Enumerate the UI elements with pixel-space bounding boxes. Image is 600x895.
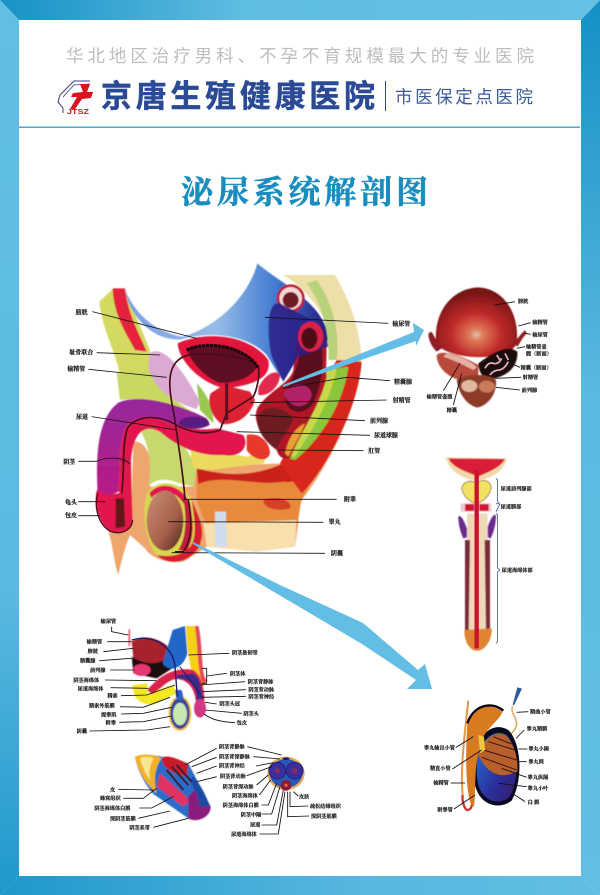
labels: 输精管壶 — [526, 343, 547, 351]
bladder posterior view — [427, 287, 552, 414]
pubic symphysis — [148, 351, 200, 409]
testis labels: 睾丸小隔 — [528, 745, 550, 753]
pelvic lateral labels: 阴囊 — [77, 727, 88, 735]
labels: 膀胱 — [518, 297, 529, 305]
labels: 尿道前列腺部 — [501, 485, 532, 493]
labels — [427, 297, 552, 414]
hospital logo — [58, 81, 93, 116]
pelvic lateral labels: 阴茎海绵体 — [73, 676, 100, 684]
header rule — [19, 126, 580, 128]
pelvic red wall and green fat — [280, 360, 362, 493]
testis labels: 睾丸精膜 — [527, 725, 548, 733]
labels — [501, 485, 533, 574]
pelvic lateral labels: 附睾 — [106, 719, 116, 727]
labels: 腹（断面） — [526, 350, 552, 358]
testis labels: 精直小管 — [430, 764, 451, 772]
seminal vesicle — [258, 372, 280, 395]
cross-section labels: 阴茎背神经 — [219, 762, 246, 770]
skin, thigh and buttock — [100, 363, 362, 575]
dissection labels: 深阴茎筋膜 — [110, 814, 137, 822]
sharp anatomical details — [122, 354, 259, 500]
urethra section — [446, 457, 533, 651]
labels: 输精管 — [532, 318, 549, 326]
testis labels — [424, 707, 551, 813]
pelvic lateral labels: 阴茎体 — [230, 669, 246, 677]
pelvic lateral labels: 输尿管 — [101, 617, 117, 625]
cross-section labels: 阴茎海绵体 — [232, 791, 259, 799]
labels: 输尿管 — [532, 331, 549, 339]
cross-section labels: 阴茎背静脉 — [219, 742, 246, 750]
testis leaders — [451, 712, 528, 809]
tagline: 华北地区治疗男科、不孕不育规模最大的专业医院 — [66, 46, 534, 66]
cross-section labels: 疏松结缔组织 — [310, 802, 342, 810]
dissection labels: 阴茎系带 — [129, 824, 151, 832]
cross-section labels: 皮肤 — [299, 793, 310, 801]
dissection labels: 阴茎海绵体白膜 — [94, 804, 131, 812]
cross-section labels: 阴茎背深静脉 — [219, 752, 251, 760]
cross-section labels: 深阴茎筋膜 — [311, 812, 338, 820]
testis detail — [424, 687, 551, 813]
cross-section labels: 阴茎背深动脉 — [223, 782, 254, 790]
cross-section labels: 尿道 — [250, 820, 261, 828]
pelvic lateral labels: 阴茎背动脉 — [248, 685, 275, 693]
cross-section labels: 阴茎背动脉 — [220, 772, 247, 780]
cross-section labels: 阴茎海绵体白膜 — [223, 801, 260, 809]
labels: 肛管 — [368, 447, 380, 455]
pelvic lateral labels: 输精管 — [87, 638, 103, 646]
pelvic lateral leaders — [89, 627, 246, 731]
labels: 射精管 — [393, 397, 411, 405]
testis labels: 附睾管 — [437, 805, 454, 813]
dissection labels — [94, 785, 151, 832]
pelvic lateral labels: 提睾肌 — [101, 710, 117, 718]
labels: 输尿管 — [392, 320, 410, 328]
labels: 包皮 — [65, 512, 77, 520]
spine — [283, 275, 362, 363]
bladder — [178, 336, 269, 388]
labels: 尿道膜部 — [501, 503, 522, 511]
testis labels: 精曲小管 — [530, 707, 551, 715]
title: 泌尿系统解剖图 — [181, 174, 428, 210]
pelvic lateral labels: 膀胱 — [88, 647, 99, 655]
testis labels: 白 膜 — [528, 798, 540, 806]
labels: 尿道球腺 — [374, 431, 398, 439]
sacral blue and rectal ring — [278, 286, 303, 311]
labels: 射精管 — [523, 373, 539, 381]
labels: 附睾 — [344, 496, 356, 504]
labels: 输精管壶腹 — [427, 393, 453, 401]
cross-section labels: 阴茎中隔 — [241, 811, 262, 819]
pelvic lateral illustration — [128, 626, 207, 731]
urethral band — [118, 418, 245, 495]
pelvic lateral labels: 尿道海绵体 — [78, 684, 104, 692]
testis labels: 睾丸输出小管 — [424, 744, 456, 752]
pelvic lateral labels: 精索 — [107, 692, 118, 700]
leader lines — [443, 302, 531, 405]
labels: 前列腺 — [370, 417, 388, 425]
main diagram: sagittal section — [63, 263, 412, 575]
labels: 精囊（断面） — [521, 364, 552, 372]
anatomy illustration — [96, 263, 362, 575]
labels: 前列腺 — [522, 386, 538, 394]
scrotum — [144, 483, 202, 562]
labels: 尿道 — [76, 413, 88, 421]
penis purple corpus — [97, 399, 210, 495]
hospital logo: JTSZ — [67, 107, 89, 116]
labels: 精囊腺 — [394, 378, 412, 386]
accreditation text: 市医保定点医院 — [395, 87, 533, 107]
pelvic lateral labels: 阴茎背静脉 — [248, 677, 274, 685]
cross-section labels: 尿道海绵体 — [231, 830, 258, 838]
testis labels: 睾丸纵隔 — [528, 773, 549, 781]
cross-section labels — [219, 742, 342, 838]
abdominal wall — [99, 288, 160, 400]
labels: 阴茎 — [63, 458, 76, 466]
pelvic lateral labels: 阴茎头冠 — [219, 699, 241, 707]
arrow: to testis detail — [193, 542, 432, 689]
dissection leaders — [118, 748, 217, 827]
labels: 阴囊 — [331, 549, 343, 557]
bracket — [496, 478, 500, 643]
pelvic organs lateral view and penile sections — [73, 617, 342, 838]
pelvic lateral labels: 精索外筋膜 — [89, 702, 116, 710]
labels: 输精管 — [67, 365, 85, 373]
rectus muscle — [113, 288, 147, 352]
leader lines — [78, 312, 390, 553]
testis labels: 睾丸网 — [528, 758, 544, 766]
cross-section illustration — [267, 757, 305, 791]
arrow: to bladder detail — [283, 323, 424, 387]
pelvic lateral labels: 包皮 — [237, 719, 248, 727]
header divider — [385, 81, 386, 111]
rectum — [256, 324, 327, 459]
pelvic lateral labels: 阴茎背神经 — [248, 692, 275, 700]
cross-section leaders — [247, 747, 309, 834]
pelvic lateral labels: 阴茎悬韧带 — [232, 649, 259, 657]
labels: 睾丸 — [329, 518, 341, 526]
hospital name: 京唐生殖健康医院 — [101, 79, 375, 114]
perineal bulb — [247, 434, 270, 459]
pelvic lateral labels — [73, 617, 275, 735]
prostate — [209, 385, 255, 424]
labels — [63, 308, 412, 557]
pelvic lateral labels: 精囊腺 — [80, 657, 96, 665]
header — [19, 46, 580, 128]
peritoneum blue — [125, 263, 328, 382]
labels: 尿道海绵体部 — [502, 566, 533, 574]
labels: 耻骨联合 — [69, 348, 93, 356]
labels: 精囊 — [447, 406, 458, 414]
labels: 龟头 — [65, 498, 78, 506]
dissection labels: 皮 — [110, 785, 116, 793]
dissection labels: 蜂窝组织 — [100, 794, 121, 802]
bladder illustration — [428, 287, 527, 407]
penis dissection illustration — [135, 755, 211, 820]
urethra illustration — [446, 457, 507, 651]
pelvic lateral labels: 前列腺 — [90, 666, 106, 674]
labels: 膀胱 — [76, 308, 88, 316]
pelvic lateral labels: 阴茎头 — [243, 709, 260, 717]
glans — [96, 490, 133, 533]
testis labels: 睾丸小叶 — [528, 784, 549, 792]
testis labels: 输精管 — [433, 778, 450, 786]
testis illustration — [462, 687, 522, 810]
